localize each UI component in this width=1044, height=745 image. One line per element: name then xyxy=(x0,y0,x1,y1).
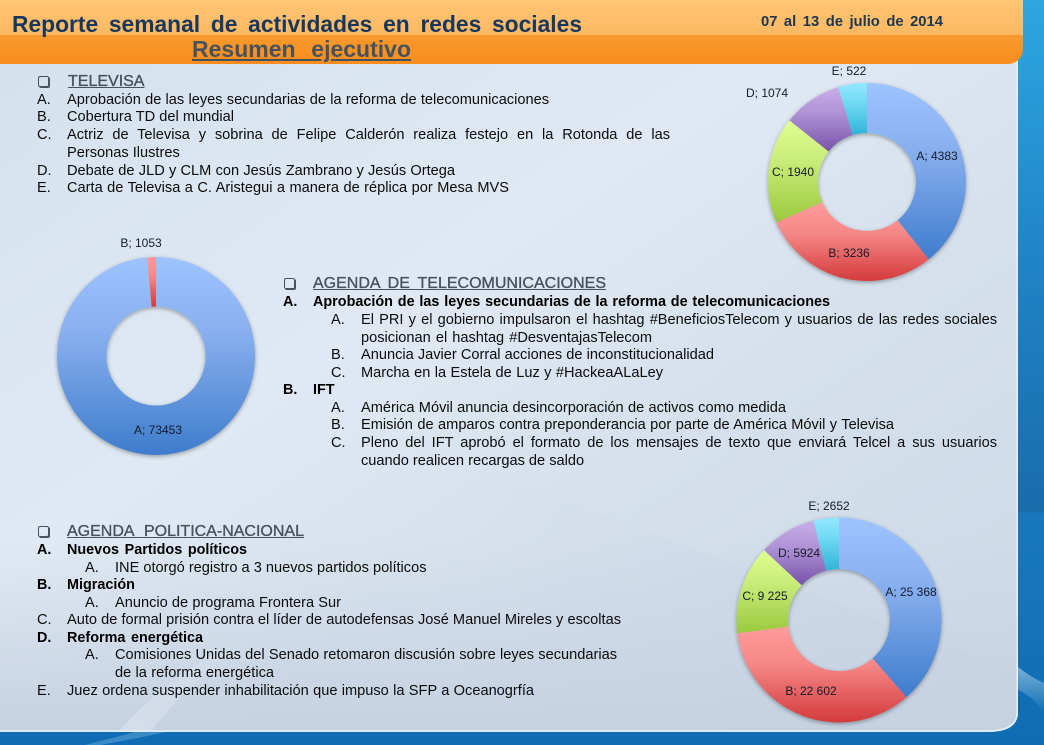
panel: Agenda política-nacional text block: D. xyxy=(37,630,51,646)
heading: Agenda política-nacional: AGENDA POLITICA-NACIONAL xyxy=(67,523,304,540)
panel: Agenda de telecomunicaciones text block: Marcha en la Estela de Luz y #HackeaALaLey xyxy=(361,365,663,381)
chart: Agenda política-nacional donut: E; 2652 xyxy=(808,499,850,513)
panel: Agenda de telecomunicaciones text block: B. xyxy=(283,382,297,398)
chart: Agenda política-nacional donut: A; 25 368 xyxy=(885,585,937,599)
panel: Agenda política-nacional text block: A. xyxy=(85,560,99,576)
icon: checkbox bullet xyxy=(284,278,295,289)
panel: Televisa text block: Personas Ilustres xyxy=(67,145,180,161)
panel: Agenda política-nacional text block: Comisiones Unidas del Senado retomaron discusión sobre leyes secundarias xyxy=(115,647,617,663)
heading: Televisa: TELEVISA xyxy=(68,73,144,90)
panel: Agenda política-nacional text block: INE otorgó registro a 3 nuevos partidos políticos xyxy=(115,560,426,576)
panel: Agenda política-nacional text block: Anuncio de programa Frontera Sur xyxy=(115,595,341,611)
chart: Televisa donut: C; 1940 xyxy=(772,165,814,179)
panel: Agenda política-nacional text block xyxy=(37,523,621,699)
panel: Agenda política-nacional text block: C. xyxy=(37,612,52,628)
chart: Televisa donut: A; 4383 xyxy=(916,149,958,163)
panel: Agenda de telecomunicaciones text block: Pleno del IFT aprobó el formato de los mensajes de texto que enviará Telcel a sus usuarios xyxy=(361,435,997,451)
title: Reporte semanal de actividades en redes sociales xyxy=(12,11,582,37)
panel: Agenda política-nacional text block: Migración xyxy=(67,577,135,593)
panel: Agenda de telecomunicaciones text block: C. xyxy=(331,365,346,381)
panel: Televisa text block: Aprobación de las leyes secundarias de la reforma de telecomunicaciones xyxy=(67,92,549,108)
panel: Televisa text block: Carta de Televisa a C. Aristegui a manera de réplica por Mesa MVS xyxy=(67,180,509,196)
panel: Agenda de telecomunicaciones text block xyxy=(283,275,997,469)
panel: Agenda de telecomunicaciones text block: C. xyxy=(331,435,346,451)
chart: Agenda política-nacional donut: C; 9 225 xyxy=(742,589,788,603)
panel: Televisa text block: Cobertura TD del mundial xyxy=(67,109,234,125)
panel: Televisa text block: D. xyxy=(37,163,52,179)
panel: Agenda política-nacional text block: A. xyxy=(85,595,99,611)
chart: Agenda de telecomunicaciones donut xyxy=(57,236,255,455)
panel: Agenda política-nacional text block: Juez ordena suspender inhabilitación que impuso la SFP a Oceanogrfía xyxy=(67,683,534,699)
chart: Agenda política-nacional donut: D; 5924 xyxy=(778,546,820,560)
panel: Agenda de telecomunicaciones text block: B. xyxy=(331,347,345,363)
panel: Agenda política-nacional text block: de la reforma energética xyxy=(115,665,274,681)
date: 07 al 13 de julio de 2014 xyxy=(761,14,943,30)
panel: Televisa text block: A. xyxy=(37,92,51,108)
panel: Agenda de telecomunicaciones text block: El PRI y el gobierno impulsaron el hashtag #BeneficiosTelecom y usuarios de las redes sociales xyxy=(361,312,997,328)
subtitle: Resumen ejecutivo xyxy=(192,36,411,62)
chart: Televisa donut: E; 522 xyxy=(832,64,867,78)
heading: Agenda de telecomunicaciones: AGENDA DE TELECOMUNICACIONES xyxy=(313,275,606,292)
chart: Televisa donut: D; 1074 xyxy=(746,86,788,100)
panel: Agenda de telecomunicaciones text block: Emisión de amparos contra preponderancia por parte de América Móvil y Televisa xyxy=(361,417,894,433)
panel: Agenda de telecomunicaciones text block: A. xyxy=(283,294,297,310)
panel: Agenda política-nacional text block: Auto de formal prisión contra el líder de autodefensas José Manuel Mireles y escoltas xyxy=(67,612,621,628)
panel: Televisa text block xyxy=(37,73,670,196)
panel: Televisa text block: B. xyxy=(37,109,51,125)
chart: Televisa donut xyxy=(746,64,966,281)
panel: Agenda de telecomunicaciones text block: Anuncia Javier Corral acciones de inconstitucionalidad xyxy=(361,347,714,363)
panel: Agenda política-nacional text block: B. xyxy=(37,577,51,593)
panel: Agenda política-nacional text block: Nuevos Partidos políticos xyxy=(67,542,247,558)
chart: Agenda de telecomunicaciones donut: B; 1053 xyxy=(120,236,162,250)
panel: Agenda de telecomunicaciones text block: B. xyxy=(331,417,345,433)
chart: Televisa donut: B; 3236 xyxy=(828,246,870,260)
chart: Agenda de telecomunicaciones donut: A; 73453 xyxy=(134,423,182,437)
panel: Agenda de telecomunicaciones text block: A. xyxy=(331,312,345,328)
panel: Agenda de telecomunicaciones text block: cuando realicen recargas de saldo xyxy=(361,453,584,469)
panel: Televisa text block: Debate de JLD y CLM con Jesús Zambrano y Jesús Ortega xyxy=(67,163,455,179)
chart: Agenda política-nacional donut: B; 22 602 xyxy=(785,684,837,698)
chart: Agenda política-nacional donut xyxy=(737,499,941,722)
panel: Televisa text block: C. xyxy=(37,127,52,143)
panel: Agenda política-nacional text block: E. xyxy=(37,683,51,699)
panel: Agenda de telecomunicaciones text block: Aprobación de las leyes secundarias de la reforma de telecomunicaciones xyxy=(313,294,830,310)
panel: Agenda de telecomunicaciones text block: A. xyxy=(331,400,345,416)
icon: checkbox bullet xyxy=(38,76,49,87)
panel: Agenda de telecomunicaciones text block: América Móvil anuncia desincorporación de activos como medida xyxy=(361,400,786,416)
panel: Agenda de telecomunicaciones text block: IFT xyxy=(313,382,335,398)
panel: Agenda política-nacional text block: Reforma energética xyxy=(67,630,203,646)
panel: Televisa text block: Actriz de Televisa y sobrina de Felipe Calderón realiza festejo en la Rotonda de las xyxy=(67,127,670,143)
panel: Televisa text block: E. xyxy=(37,180,51,196)
icon: checkbox bullet xyxy=(38,526,49,537)
header banner xyxy=(0,0,1023,64)
panel: Agenda política-nacional text block: A. xyxy=(37,542,51,558)
panel: Agenda política-nacional text block: A. xyxy=(85,647,99,663)
panel: Agenda de telecomunicaciones text block: posicionan el hashtag #DesventajasTelecom xyxy=(361,330,652,346)
